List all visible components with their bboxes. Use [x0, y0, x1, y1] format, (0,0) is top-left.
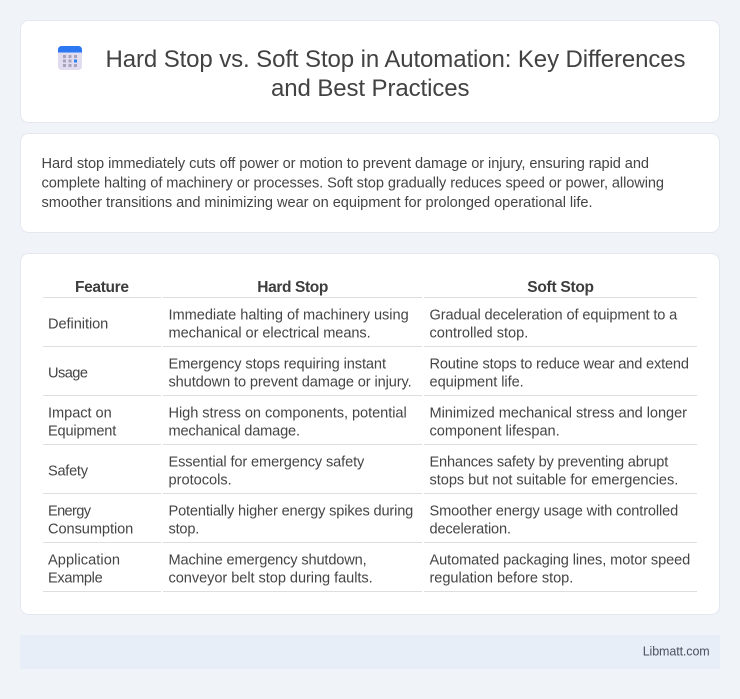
intro paragraph: Hard stop immediately cuts off power or motion to prevent damage or injury, ensuring rapid and [42, 156, 649, 172]
row: energy consumption: stop. [168, 521, 199, 537]
footer [20, 635, 720, 669]
row: application example: Machine emergency shutdown, [168, 552, 367, 568]
table header row: Feature [75, 279, 129, 296]
row: definition: mechanical or electrical means. [168, 325, 371, 341]
row: impact on equipment [48, 405, 687, 439]
row: usage: Usage [48, 365, 88, 381]
panel: comparison table [20, 254, 720, 614]
title: Hard Stop vs. Soft Stop in Automation: Key Differences [106, 46, 686, 73]
row: application example: regulation before stop. [430, 570, 573, 586]
row: impact on equipment: component lifespan. [430, 423, 560, 439]
table header row: Soft Stop [527, 279, 594, 296]
table header row: Hard Stop [257, 279, 328, 296]
row: definition: Gradual deceleration of equipment to a [430, 307, 678, 323]
row: safety: Enhances safety by preventing abrupt [430, 454, 668, 470]
row: usage: Routine stops to reduce wear and extend [430, 356, 689, 372]
row: safety [48, 454, 678, 488]
row: safety: stops but not suitable for emergencies. [430, 472, 678, 488]
row: application example: Automated packaging lines, motor speed [430, 552, 690, 568]
row: usage [48, 356, 689, 390]
panel: title card [20, 20, 720, 122]
row: application example: Application [48, 552, 120, 568]
row: safety: Safety [48, 463, 89, 479]
row: impact on equipment: Impact on [48, 405, 112, 421]
row: energy consumption: Energy [48, 503, 92, 519]
icon: calendar [58, 46, 82, 70]
intro paragraph: smoother transitions and minimizing wear on equipment for prolonged operational life. [42, 195, 592, 211]
table header row [75, 279, 594, 296]
row: definition: controlled stop. [430, 325, 528, 341]
row: impact on equipment: Equipment [48, 423, 116, 439]
panel: intro text [20, 134, 720, 232]
intro paragraph: complete halting of machinery or processes. Soft stop gradually reduces speed or power, allowing [42, 176, 664, 192]
row: energy consumption: deceleration. [430, 521, 511, 537]
row: application example: Example [48, 570, 103, 586]
row: definition: Immediate halting of machinery using [168, 307, 409, 323]
row: impact on equipment: mechanical damage. [168, 423, 300, 439]
row: safety: protocols. [168, 472, 232, 488]
row: usage: Emergency stops requiring instant [168, 356, 386, 372]
footer attribution: Libmatt.com [643, 645, 710, 659]
row: safety: Essential for emergency safety [168, 454, 365, 470]
row: impact on equipment: High stress on components, potential [168, 405, 407, 421]
title [106, 46, 686, 102]
row: energy consumption: Smoother energy usage with controlled [430, 503, 678, 519]
row: energy consumption [48, 503, 678, 537]
row: application example: conveyor belt stop during faults. [168, 570, 373, 586]
row: definition: Definition [48, 316, 108, 332]
row: application example [48, 552, 690, 586]
row: impact on equipment: Minimized mechanical stress and longer [430, 405, 687, 421]
row: energy consumption: Consumption [48, 521, 133, 537]
intro paragraph [42, 156, 664, 211]
row: energy consumption: Potentially higher energy spikes during [168, 503, 413, 519]
title: and Best Practices [271, 75, 470, 102]
row: definition [48, 307, 678, 341]
row: usage: equipment life. [430, 374, 524, 390]
row: usage: shutdown to prevent damage or injury. [168, 374, 412, 390]
